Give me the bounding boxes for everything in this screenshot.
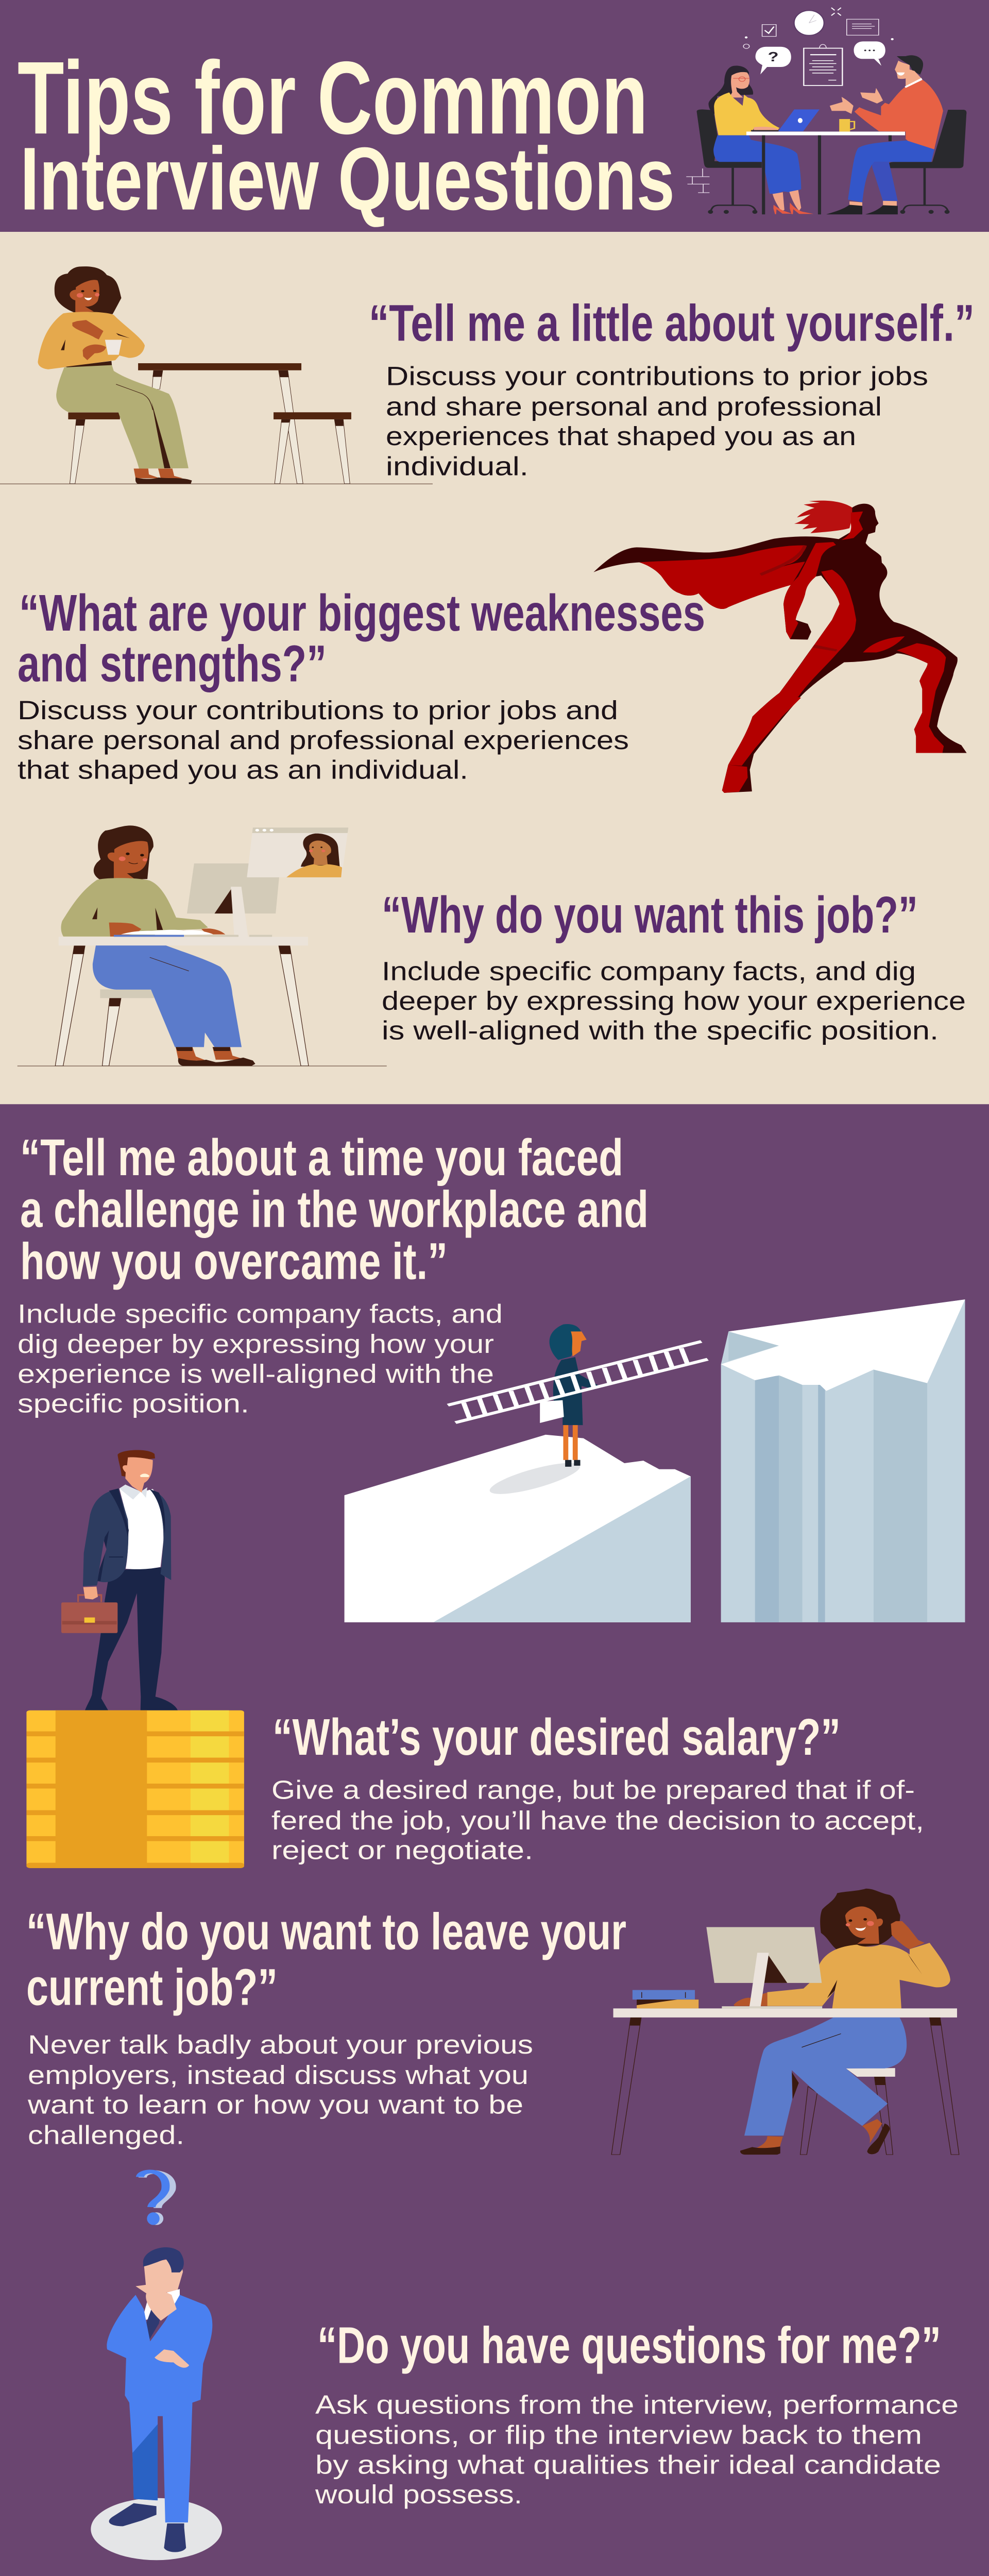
illustration: stack of gold coins (26, 1710, 244, 1868)
title (18, 40, 675, 229)
question block: questions for me (315, 2317, 959, 2509)
illustration: superhero woman with red cape (593, 501, 967, 793)
cape (593, 536, 839, 609)
body text: Discuss your contributions to prior jobs and (18, 696, 618, 725)
question block: leave current job (26, 1903, 626, 2150)
body text: experience is well-aligned with the (18, 1359, 494, 1388)
body text: reject or negotiate. (271, 1835, 533, 1865)
illustration: woman on phone at desk (611, 1889, 959, 2155)
body text: experiences that shaped you as an (386, 421, 856, 451)
heading (18, 585, 705, 692)
businesswoman (540, 1324, 599, 1467)
question block: faced a challenge (18, 1129, 649, 1418)
body text (386, 361, 928, 481)
body text: that shaped you as an individual. (18, 755, 468, 785)
heading: current job?” (26, 1959, 278, 2016)
video call window (247, 827, 348, 877)
body text (27, 2030, 533, 2150)
heading: how you overcame it.” (20, 1233, 448, 1290)
hair (794, 501, 863, 540)
icon: question mark (140, 2172, 172, 2225)
body text: and share personal and professional (386, 392, 882, 421)
man interviewer (826, 55, 943, 214)
heading (26, 1903, 626, 2016)
body text (18, 696, 629, 785)
heading: “Why do you want to leave your (26, 1903, 626, 1960)
body text: questions, or flip the interview back to them (315, 2420, 922, 2449)
icon: clipboard document (804, 44, 842, 86)
floor disc (91, 2498, 222, 2560)
body text: specific position. (18, 1388, 249, 1418)
illustration: woman at table with cup (0, 266, 433, 484)
icon: ellipsis speech bubble (854, 41, 885, 66)
left chair (697, 109, 762, 214)
body text: individual. (386, 451, 528, 481)
table with laptop and mug (746, 109, 905, 214)
body text: Never talk badly about your previous (28, 2030, 533, 2059)
body text: is well-aligned with the specific position. (382, 1015, 939, 1045)
body text (271, 1775, 924, 1865)
body text: Include specific company facts, and (18, 1299, 503, 1328)
question block: tell me about yourself (369, 295, 975, 481)
icon: briefcase (61, 1595, 117, 1633)
body text (382, 956, 966, 1045)
illustration: man with briefcase standing on coins (61, 1450, 178, 1710)
question block: weaknesses and strengths (18, 585, 705, 785)
body text: deeper by expressing how your experience (382, 986, 966, 1015)
heading (20, 1129, 649, 1290)
body text: want to learn or how you want to be (27, 2090, 523, 2119)
body text: Give a desired range, but be prepared that if of- (271, 1775, 915, 1805)
panel: header (0, 0, 989, 232)
figure (722, 504, 967, 793)
left ice cliff (345, 1435, 691, 1622)
illustration: businesswoman with ladder on ice cliffs (345, 1299, 965, 1622)
body text: Include specific company facts, and dig (382, 956, 916, 986)
body text: by asking what qualities their ideal candidate (315, 2450, 941, 2480)
right ice cliff (721, 1299, 965, 1622)
question block: desired salary (271, 1708, 924, 1865)
illustration: woman at computer on a video call (18, 825, 387, 1066)
icon: question speech bubble (756, 47, 791, 74)
question block: why this job (382, 886, 966, 1045)
icon: floating office symbols (686, 8, 894, 193)
body text (18, 1299, 503, 1418)
body text: Ask questions from the interview, performance (315, 2390, 959, 2419)
illustration: interview at a table (686, 8, 966, 214)
heading: “Tell me about a time you faced (20, 1129, 623, 1187)
body text: fered the job, you’ll have the decision to accept, (271, 1806, 924, 1835)
body text (315, 2390, 959, 2509)
ladder (448, 1342, 708, 1422)
panel: purple question section (0, 1104, 989, 2576)
illustration: thinking man in blue suit (91, 2172, 222, 2560)
woman at desk (59, 825, 308, 1066)
body text: employers, instead discuss what you (28, 2060, 528, 2090)
icon: question speech bubble: ? (768, 49, 779, 64)
body text: dig deeper by expressing how your (18, 1329, 494, 1359)
heading: and strengths?” (18, 635, 327, 692)
heading: a challenge in the workplace and (20, 1181, 649, 1238)
body text: share personal and professional experiences (18, 725, 629, 755)
body text: challenged. (28, 2120, 184, 2150)
body text: Discuss your contributions to prior jobs (386, 361, 928, 391)
body text: would possess. (315, 2480, 522, 2509)
right chair (887, 110, 966, 214)
woman interviewee (708, 65, 813, 214)
panel: cream question section (0, 232, 989, 1104)
